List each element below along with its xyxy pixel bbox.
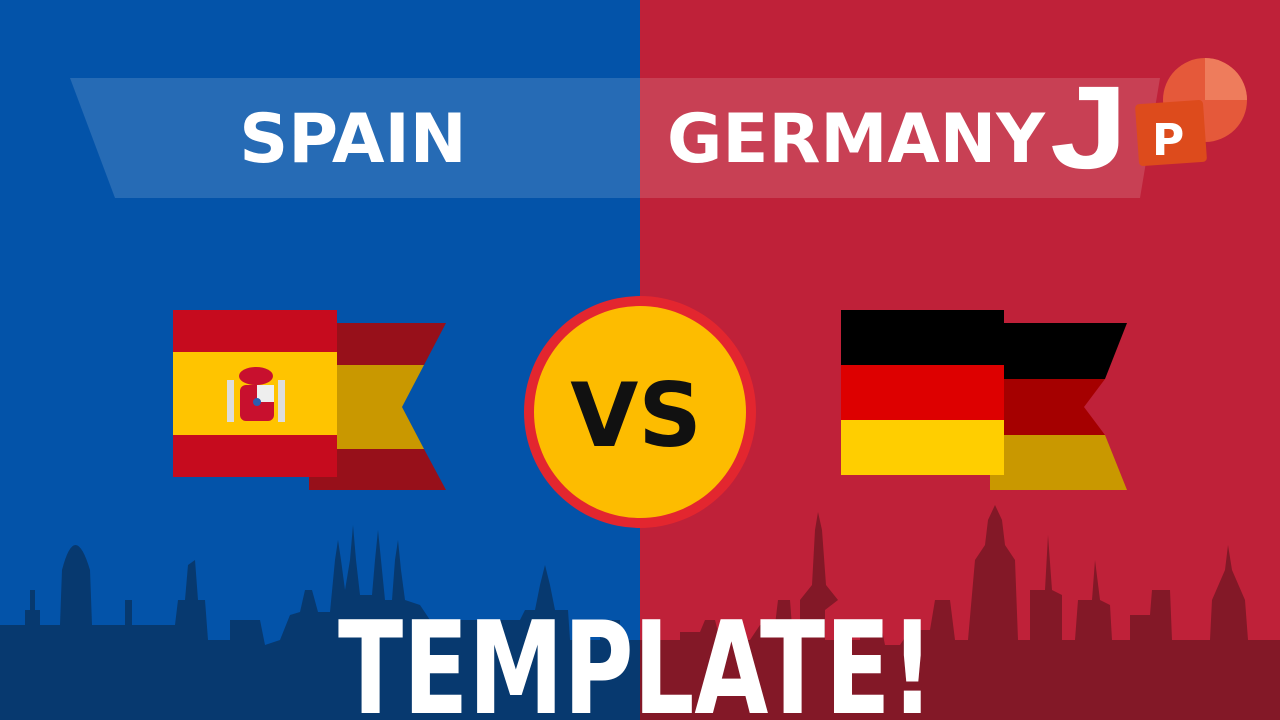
skyline: germany: [640, 505, 1280, 720]
panel: germany background: [640, 0, 1280, 720]
flag: germany back wave: [990, 323, 1127, 490]
panel: spain background: [0, 0, 640, 720]
vs badge: VS: [570, 364, 702, 467]
flag: spain back wave: [309, 323, 446, 490]
logo: J + powerpoint: P: [1152, 115, 1184, 166]
logo: J + powerpoint: [1050, 58, 1247, 194]
vs badge: [524, 296, 756, 528]
logo: J + powerpoint: J: [1050, 62, 1128, 194]
skyline: spain: [0, 525, 640, 720]
heading: SPAIN: SPAIN: [239, 100, 467, 179]
flag: spain front: [173, 310, 337, 477]
flag: germany front: [841, 310, 1004, 475]
heading: GERMANY: GERMANY: [667, 100, 1046, 179]
banner band: [70, 78, 1160, 198]
icon: coat of arms: [227, 367, 285, 422]
